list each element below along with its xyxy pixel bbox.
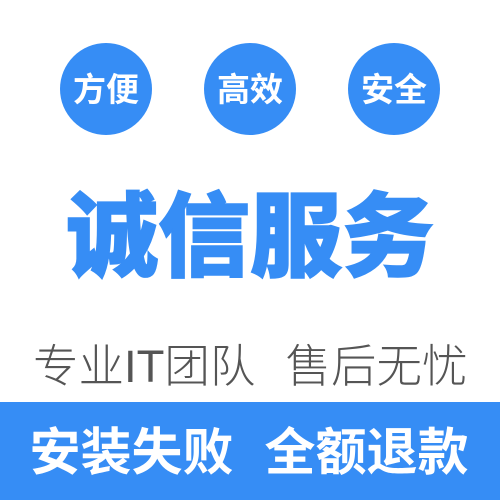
badge: 安全: 安全 [361, 71, 427, 108]
badge: 方便 [60, 43, 152, 135]
main heading: 诚信服务 [66, 187, 434, 289]
badge: 高效: 高效 [217, 71, 283, 108]
badge: 安全 [348, 43, 440, 135]
badge: 方便: 方便 [73, 71, 139, 108]
badge: 高效 [204, 43, 296, 135]
bottom banner [0, 402, 500, 500]
subheading: 专业IT团队 售后无忧 [33, 341, 467, 392]
banner text: 安装失败 全额退款 [30, 424, 469, 481]
